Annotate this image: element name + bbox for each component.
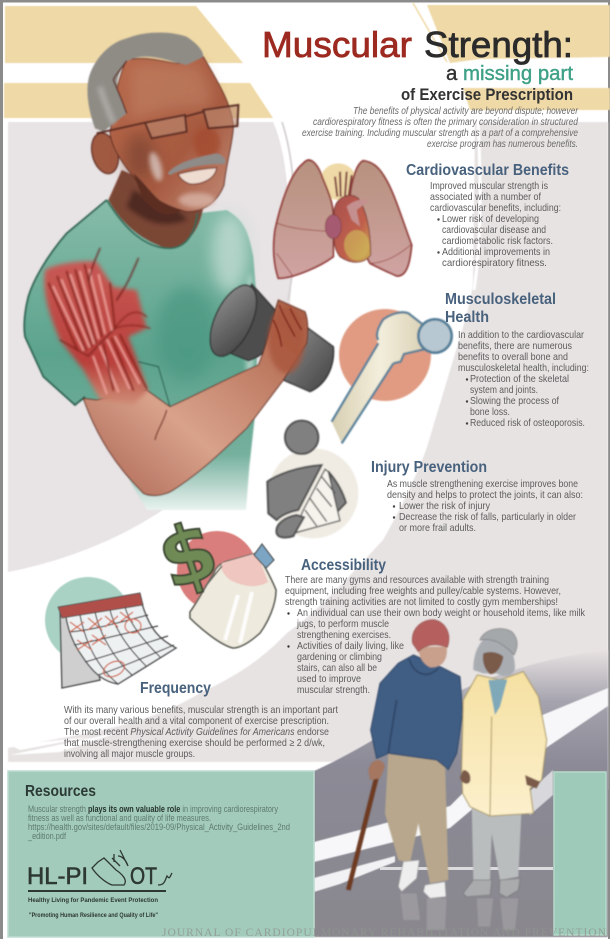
text: frequency: that muscle-strengthening exercise should be performed ≥ 2 d/wk, — [64, 738, 325, 749]
text: cardiovascular benefits: associated with a number of — [430, 192, 541, 203]
subtitle line two: of Exercise Prescription — [401, 86, 573, 104]
text: resources: Muscular strength plays its own valuable role in improving cardiorespiratory — [28, 804, 278, 814]
text: accessibility: Activities of daily living, like — [297, 641, 404, 652]
text: cardiovascular benefits: Improved muscular strength is — [430, 181, 548, 192]
man: face — [110, 57, 233, 212]
text: accessibility: jugs, to perform muscle — [296, 619, 389, 630]
heading: cardiovascular benefits: Cardiovascular Benefits — [406, 162, 569, 179]
panel: right decorative green box — [554, 772, 606, 935]
man: shirt outline — [24, 200, 107, 405]
person: woman, grey hat — [480, 629, 517, 655]
text: injury prevention: Decrease the risk of falls, particularly in older — [399, 512, 577, 523]
person: woman, hair — [473, 637, 515, 676]
intro paragraph — [302, 106, 579, 150]
person: woman, grey pants — [472, 803, 522, 880]
text: accessibility: strength training activities are not limited to costly gym memberships! — [285, 597, 558, 608]
person: woman, yellow coat — [462, 672, 547, 816]
logo: HL-PIVOT: "Promoting Human Resilience and Quality of Life" — [29, 913, 158, 919]
text: cardiovascular benefits: Lower risk of developing — [442, 214, 539, 225]
illustration: man lifting dumbbell — [24, 32, 334, 510]
text: frequency — [64, 705, 338, 760]
person: woman, hands — [460, 770, 540, 788]
text: injury prevention: Lower the risk of injury — [399, 501, 491, 512]
man: exposed muscle — [44, 248, 150, 405]
text: accessibility: There are many gyms and resources available with strength training — [285, 575, 549, 586]
heading: musculoskeletal health — [445, 291, 556, 326]
man: torso in green t-shirt — [24, 200, 257, 510]
journal watermark: JOURNAL OF CARDIOPULMONARY REHABILITATION AND PREVENTION — [162, 927, 607, 939]
subtitle: a missing part — [446, 63, 573, 85]
icon: lungs and heart — [274, 160, 412, 278]
text: cardiovascular benefits — [430, 181, 561, 269]
title: Muscular — [262, 24, 412, 65]
man: glasses — [97, 105, 238, 138]
text: resources: fitness as well as functional and quality of life measures. — [28, 813, 211, 823]
man: moustache — [168, 153, 225, 175]
text: musculoskeletal health: bone loss. — [470, 407, 510, 418]
panel: resources — [8, 771, 314, 937]
text: cardiovascular benefits: cardiovascular benefits, including: — [430, 203, 561, 214]
text: musculoskeletal health: Protection of the skeletal — [470, 374, 569, 385]
person: man, cane — [348, 770, 378, 890]
text: resources: _edition.pdf — [27, 831, 66, 841]
person: man, face — [418, 647, 447, 667]
logo: HL-PIVOT: Healthy Living for Pandemic Event Protection — [28, 897, 158, 904]
text: frequency: With its many various benefits, muscular strength is an important part — [64, 705, 338, 716]
text: musculoskeletal health: Reduced risk of osteoporosis. — [470, 418, 585, 429]
man: smile — [178, 168, 217, 184]
text: accessibility — [285, 575, 586, 696]
person: woman, teal shirt — [488, 679, 507, 715]
text: injury prevention: density and helps to protect the joints, it can also: — [387, 490, 583, 501]
heading: musculoskeletal health: Health — [445, 309, 489, 326]
background: floor and snow strips — [314, 650, 608, 937]
man: neck — [108, 170, 203, 248]
text: frequency: of our overall health and a vital component of exercise prescription. — [64, 716, 329, 727]
heading: resources: Resources — [25, 783, 96, 800]
text: musculoskeletal health: In addition to the cardiovascular — [458, 330, 585, 341]
text: accessibility: used to improve — [297, 674, 361, 685]
text: cardiovascular benefits: cardiometabolic risk factors. — [442, 236, 553, 247]
title: Strength: — [424, 24, 573, 65]
heading: accessibility: Accessibility — [301, 557, 386, 574]
text: cardiovascular benefits: cardiorespiratory fitness. — [442, 258, 547, 269]
text: cardiovascular benefits: Additional improvements in — [442, 247, 550, 258]
text: accessibility: gardening or climbing — [297, 652, 382, 663]
title — [262, 24, 573, 85]
text: resources — [27, 804, 290, 841]
text: musculoskeletal health: benefits to overall bone and — [458, 352, 568, 363]
person: man with cane, trousers — [385, 753, 448, 883]
intro paragraph: exercise program has numerous benefits. — [427, 139, 578, 150]
text: resources: https://health.gov/sites/default/files/2019-09/Physical_Activity_Guidelines_2nd — [28, 822, 290, 832]
man: dumbbell — [201, 278, 334, 392]
person: foot reflections — [400, 893, 518, 930]
person: man, blue hoodie — [371, 655, 463, 769]
person: man, shoes — [398, 860, 446, 898]
text: injury prevention — [387, 479, 583, 534]
logo: HL-PIVOT — [27, 850, 172, 919]
person: woman, face — [483, 652, 503, 674]
icon: person with arm in sling — [267, 421, 358, 538]
icon: milk jug with dollar sign: $ — [147, 502, 229, 608]
text: musculoskeletal health — [458, 330, 589, 429]
text: frequency: involving all major muscle groups. — [64, 749, 195, 760]
man: sleeve hem — [138, 362, 170, 407]
man: ear — [87, 130, 123, 177]
text: musculoskeletal health: musculoskeletal health, including: — [458, 363, 589, 374]
text: musculoskeletal health: Slowing the process of — [470, 396, 559, 407]
icon: milk jug with dollar sign — [147, 502, 276, 648]
text: musculoskeletal health: system and joints. — [470, 385, 538, 396]
text: accessibility: strengthening exercises. — [297, 630, 391, 641]
logo: HL-PIVOT: OT — [130, 863, 157, 890]
icon: calendar with crossed days — [45, 577, 176, 688]
text: accessibility: stairs, can also all be — [297, 663, 377, 674]
heading: injury prevention: Injury Prevention — [371, 459, 487, 476]
text: injury prevention: or more frail adults. — [399, 523, 476, 534]
illustration: two older adults walking — [348, 620, 547, 930]
man: finger lines — [273, 305, 302, 347]
logo: shoe and figure mark — [92, 850, 172, 885]
logo: HL-PIVOT: HL-PI — [27, 863, 88, 890]
person: man, red hat — [412, 620, 449, 652]
icon: femur bone — [332, 309, 452, 443]
man: hair — [87, 32, 203, 132]
text: accessibility: equipment, including free weights and pulley/cable systems. However, — [285, 586, 561, 597]
heading: frequency: Frequency — [140, 680, 211, 697]
text: accessibility: muscular strength. — [297, 685, 370, 696]
text: frequency: The most recent Physical Activity Guidelines for Americans endorse — [64, 727, 329, 738]
text: cardiovascular benefits: cardiovascular disease and — [442, 225, 546, 236]
person: woman, shoes — [463, 878, 520, 897]
text: musculoskeletal health: benefits, there are numerous — [458, 341, 572, 352]
person: man, hand — [368, 760, 385, 780]
heading: musculoskeletal health: Musculoskeletal — [445, 291, 556, 308]
man: arm and hand — [83, 300, 308, 496]
text: injury prevention: As muscle strengthening exercise improves bone — [387, 479, 578, 490]
